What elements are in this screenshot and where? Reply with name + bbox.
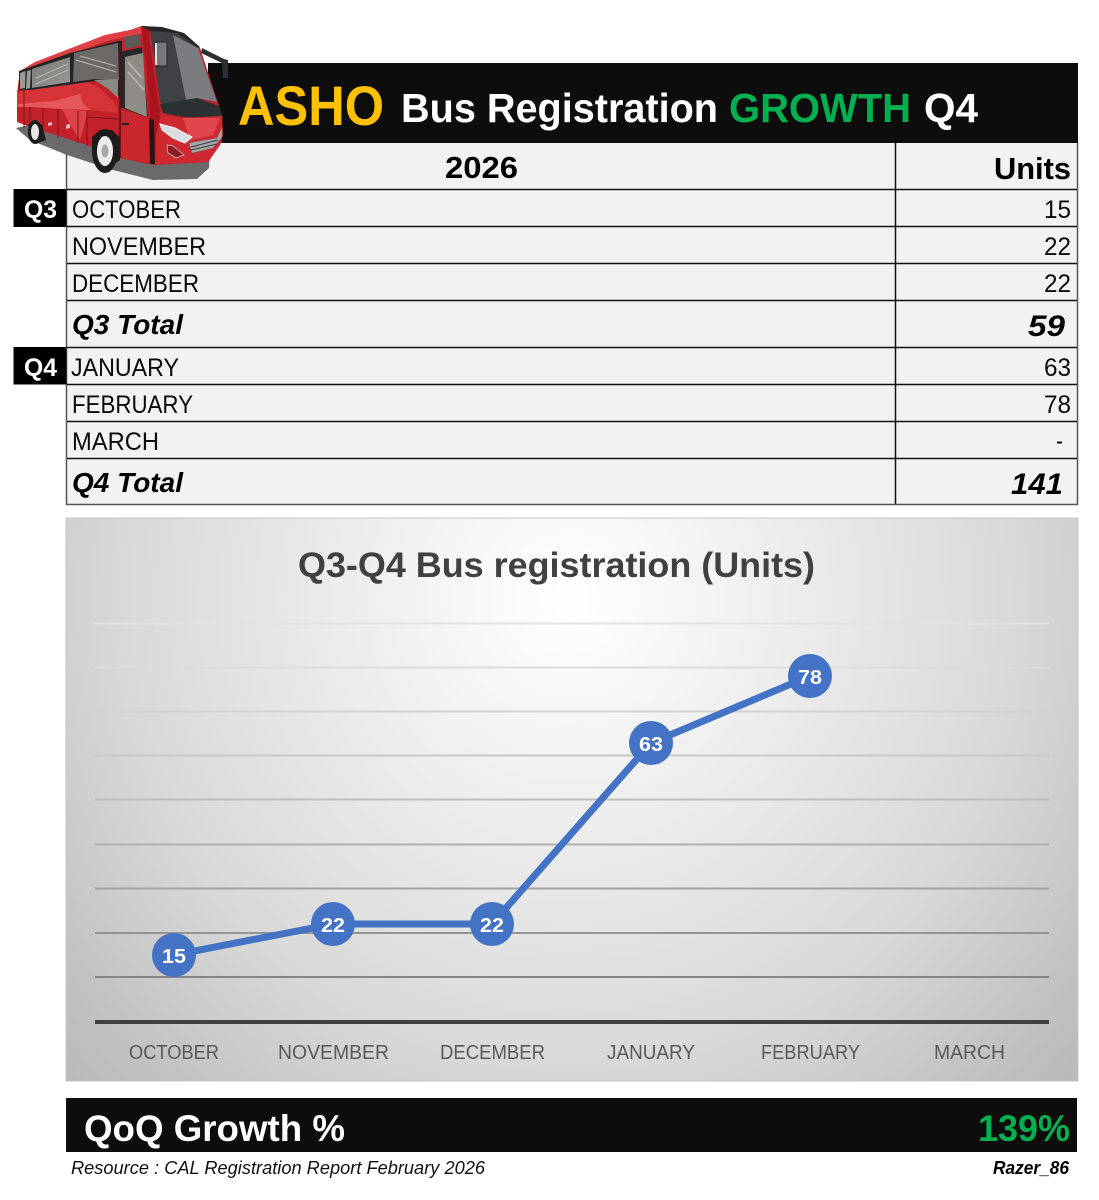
row: Q3 total: Q3 Total bbox=[72, 309, 184, 340]
upper side panel bbox=[17, 82, 119, 113]
lower side panels bbox=[24, 90, 118, 146]
title banner bbox=[208, 63, 1078, 143]
x axis labels: FEBRUARY bbox=[761, 1042, 860, 1064]
row: December: 22 bbox=[1044, 270, 1071, 298]
row: January bbox=[71, 354, 1071, 382]
row: March: - bbox=[1056, 427, 1063, 455]
door frame bbox=[120, 47, 148, 118]
roof stripe bbox=[20, 26, 144, 72]
QoQ label: QoQ Growth % bbox=[84, 1108, 345, 1149]
icon: red bus bbox=[16, 26, 228, 180]
side windows frame bbox=[19, 41, 122, 98]
row: December: DECEMBER bbox=[72, 270, 199, 298]
row: Q4 total: 141 bbox=[1011, 468, 1063, 501]
roof edge bbox=[141, 26, 200, 48]
data point values: 22 bbox=[321, 915, 345, 937]
fog lamp bbox=[167, 145, 184, 158]
headlight bbox=[160, 124, 192, 143]
luggage door latches bbox=[48, 122, 70, 129]
row: November: NOVEMBER bbox=[72, 233, 206, 261]
x axis labels bbox=[129, 1042, 1005, 1064]
dashboard band bbox=[160, 98, 222, 118]
header row: Units bbox=[994, 151, 1071, 186]
windshield bbox=[150, 30, 217, 105]
data point values bbox=[162, 667, 822, 968]
header row bbox=[445, 150, 1071, 186]
side window 1 bbox=[32, 57, 70, 88]
quarter tag: Q3 bbox=[14, 189, 66, 227]
row: Q3 total: 59 bbox=[1028, 310, 1065, 343]
bus body bbox=[17, 26, 223, 165]
door glass bbox=[125, 53, 147, 117]
row: Q4 total bbox=[72, 467, 1063, 501]
grille bbox=[189, 127, 222, 153]
title word: GROWTH: GROWTH bbox=[729, 85, 911, 131]
x axis labels: MARCH bbox=[934, 1042, 1005, 1064]
lower side shine bbox=[18, 94, 90, 110]
x axis bbox=[95, 1020, 1049, 1024]
quarter tag: Q3: Q3 bbox=[24, 196, 57, 224]
upper door window bbox=[124, 34, 141, 49]
QoQ value: 139% bbox=[978, 1108, 1070, 1149]
row: October: 15 bbox=[1044, 196, 1071, 224]
x axis labels: OCTOBER bbox=[129, 1042, 219, 1064]
row: November bbox=[72, 233, 1071, 261]
row: November: 22 bbox=[1044, 233, 1071, 261]
row: Q4 total: Q4 Total bbox=[72, 467, 184, 498]
row: January: 63 bbox=[1044, 354, 1071, 382]
row: December bbox=[72, 270, 1071, 298]
x axis labels: JANUARY bbox=[607, 1042, 695, 1064]
front face bbox=[155, 115, 223, 164]
author credit: Razer_86 bbox=[993, 1158, 1070, 1178]
data point values: 22 bbox=[480, 915, 504, 937]
lower glass bbox=[94, 79, 118, 98]
rear wheel bbox=[28, 120, 46, 144]
title words: Bus Registration: Bus Registration bbox=[401, 85, 718, 131]
rear windows bbox=[20, 70, 31, 89]
row: March: MARCH bbox=[72, 428, 159, 456]
chart title: Q3-Q4 Bus registration (Units) bbox=[298, 546, 815, 585]
header row: 2026 bbox=[445, 150, 518, 185]
window glare bbox=[36, 56, 116, 84]
row: October: OCTOBER bbox=[72, 196, 181, 224]
data point values: 15 bbox=[162, 946, 186, 968]
bus shadow bbox=[16, 125, 210, 180]
front wheel bbox=[92, 129, 120, 173]
data line bbox=[174, 676, 810, 955]
line chart panel bbox=[66, 518, 1078, 1081]
row: February: FEBRUARY bbox=[72, 391, 193, 419]
source note: Resource : CAL Registration Report February 2026 bbox=[71, 1158, 486, 1178]
row: February: 78 bbox=[1044, 391, 1071, 419]
door panel bbox=[120, 110, 151, 163]
data table bbox=[66, 143, 1078, 505]
data point values: 78 bbox=[798, 667, 822, 689]
interior mirror bbox=[155, 42, 167, 66]
side window 2 bbox=[73, 43, 119, 82]
front pillar bbox=[141, 26, 161, 164]
QoQ growth bar bbox=[66, 1098, 1077, 1152]
exterior mirror bbox=[201, 48, 228, 78]
row: February bbox=[72, 391, 1071, 419]
quarter tag: Q4 bbox=[14, 347, 66, 384]
data point values: 63 bbox=[639, 734, 663, 756]
quarter tag: Q4: Q4 bbox=[24, 354, 57, 382]
row: October bbox=[72, 196, 1071, 224]
x axis labels: DECEMBER bbox=[440, 1042, 545, 1064]
row: Q3 total bbox=[72, 309, 1065, 343]
row: March bbox=[72, 427, 1063, 456]
row: January: JANUARY bbox=[71, 354, 179, 382]
title word: ASHO: ASHO bbox=[238, 74, 384, 137]
data point markers bbox=[152, 654, 832, 977]
title word: Q4: Q4 bbox=[924, 85, 978, 131]
x axis labels: NOVEMBER bbox=[278, 1042, 389, 1064]
